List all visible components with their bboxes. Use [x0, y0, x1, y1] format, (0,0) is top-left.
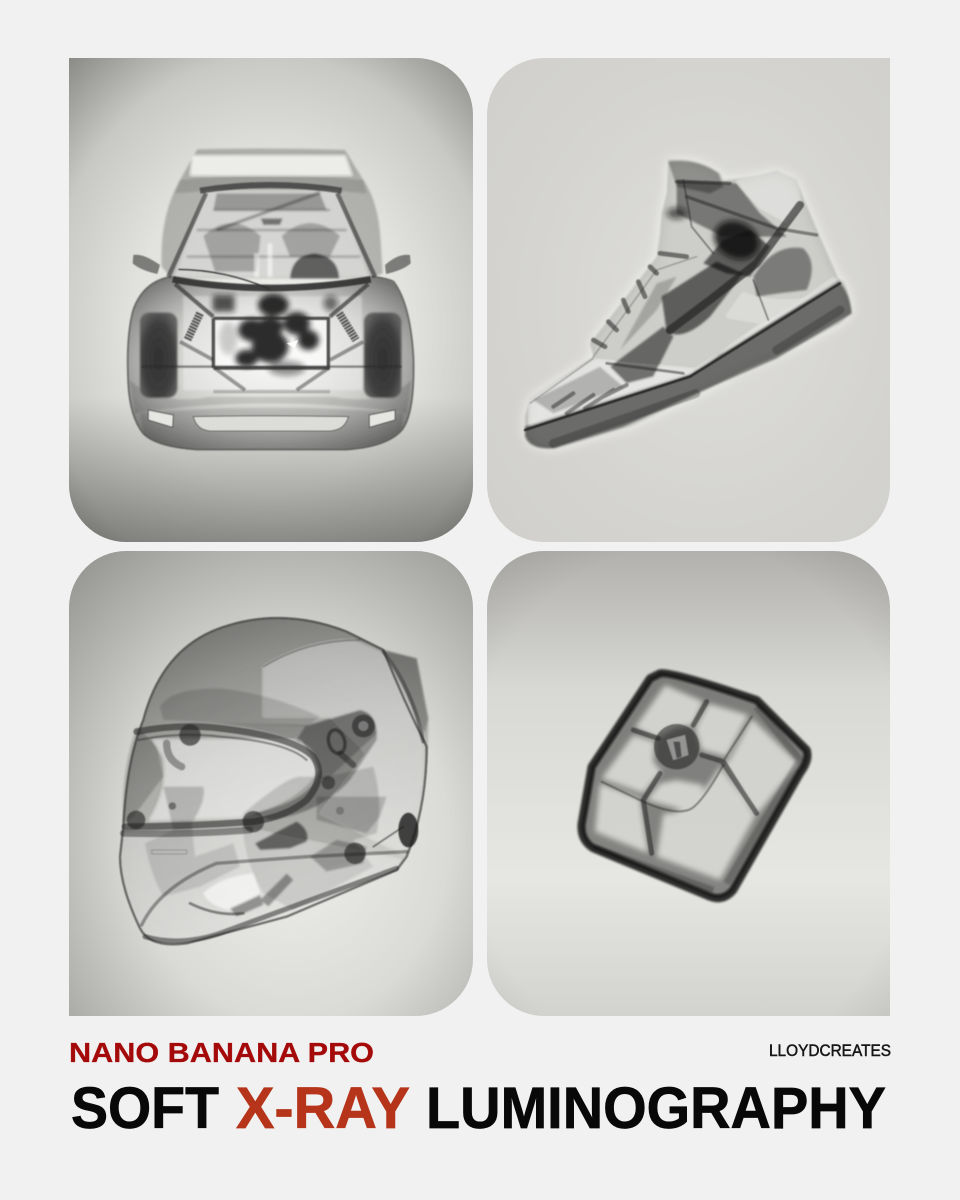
panel: x-ray sneaker — [487, 58, 890, 542]
illustration: car front view — [128, 148, 414, 449]
brand wordmark: LLOYDCREATES: LLOYDCREATES — [769, 1042, 891, 1060]
title: SOFT X-RAY LUMINOGRAPHY: X-RAY — [236, 1076, 410, 1141]
illustration: high-top sneaker with foot bones — [525, 159, 852, 449]
panel: x-ray keycap — [487, 551, 890, 1016]
illustration: racing helmet — [120, 618, 428, 944]
title: SOFT X-RAY LUMINOGRAPHY: LUMINOGRAPHY — [426, 1076, 886, 1141]
subtitle: NANO BANANA PRO: NANO BANANA PRO — [69, 1037, 374, 1068]
title: SOFT X-RAY LUMINOGRAPHY: SOFT — [71, 1076, 219, 1141]
panel: x-ray car — [69, 58, 473, 542]
illustration: keyboard keycap — [581, 673, 807, 898]
panel: x-ray helmet — [69, 551, 473, 1016]
title: SOFT X-RAY LUMINOGRAPHY — [71, 1076, 886, 1141]
